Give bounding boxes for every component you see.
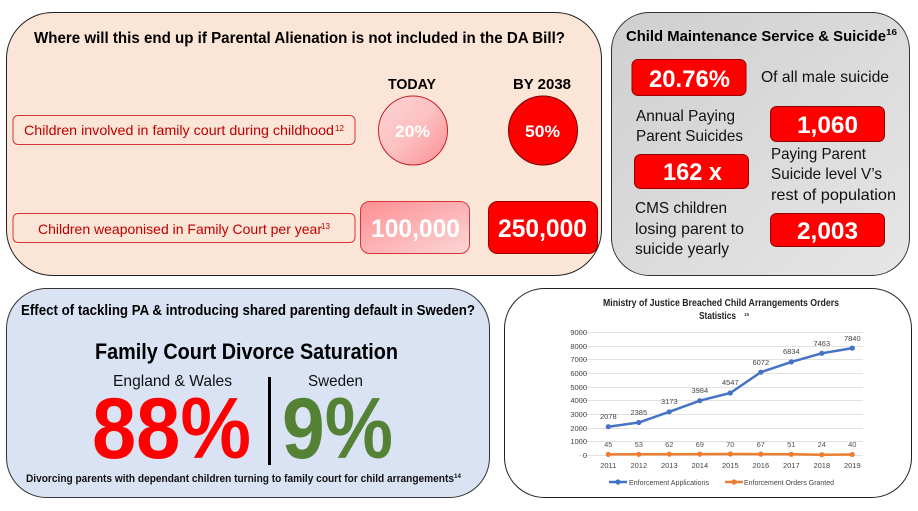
divider: [268, 377, 271, 465]
series: enforcement orders granted: 53: [635, 440, 643, 449]
box: 100,000 today: [360, 202, 470, 254]
x axis labels: 2016: [752, 461, 769, 470]
circle: 50 percent by 2038: 50%: [525, 122, 560, 141]
stat: 9 percent: 9%: [282, 381, 393, 477]
series: enforcement orders granted: 24: [818, 440, 826, 449]
subheading: family court divorce saturation: Family Court Divorce Saturation: [95, 339, 398, 364]
heading: child maintenance service: Child Maintenance Service & Suicide: [626, 28, 886, 45]
x axis labels: 2013: [661, 461, 678, 470]
series: enforcement orders granted: 70: [726, 440, 734, 449]
circle: 20 percent today: [378, 96, 448, 165]
label: sweden: Sweden: [308, 373, 363, 390]
chart title: [603, 298, 839, 322]
y axis labels: [570, 328, 587, 460]
y axis labels: 2000: [570, 424, 587, 433]
footnote: divorcing parents: Divorcing parents with dependant children turning to family court for child arrangements: [26, 473, 454, 485]
series: enforcement applications: 3984: [691, 386, 708, 395]
x axis labels: 2011: [600, 461, 616, 470]
text: annual paying parent suicides: Parent Suicides: [636, 128, 743, 145]
column label: today: TODAY: [388, 76, 436, 93]
text: paying parent suicide level: rest of population: [771, 187, 896, 204]
box: 250,000 by 2038: 250,000: [498, 215, 587, 243]
panel: sweden comparison: [6, 288, 490, 498]
label box: children involved in family court: [13, 116, 355, 144]
y axis labels: 5000: [570, 383, 587, 392]
x axis labels: 2018: [813, 461, 830, 470]
heading: effect of tackling pa: Effect of tackling PA & introducing shared parenting default in Sweden?: [21, 302, 475, 319]
text: cms children losing parent: CMS children: [635, 200, 727, 217]
panel: child maintenance service and suicide: [612, 12, 910, 276]
series: enforcement applications: [600, 334, 861, 429]
series: enforcement orders granted: 45: [604, 440, 612, 449]
chart title: Statistics: [699, 311, 736, 322]
series: enforcement applications: 2078: [600, 412, 617, 421]
y axis labels: 8000: [570, 342, 587, 351]
y axis labels: 3000: [570, 410, 587, 419]
label box: children weaponised: [13, 214, 355, 242]
box: 100,000 today: 100,000: [371, 215, 460, 243]
chart title: 15: [744, 312, 750, 317]
y axis labels: 0: [583, 451, 587, 460]
series: enforcement applications: 6072: [752, 358, 769, 367]
series: enforcement orders granted: 51: [787, 440, 795, 449]
box: 250,000 by 2038: [488, 202, 598, 254]
series: enforcement applications: 2385: [630, 408, 647, 417]
series: enforcement applications: 7840: [844, 334, 861, 343]
stat: 162 x: 162 x: [663, 159, 723, 186]
series: enforcement orders granted: 67: [757, 440, 765, 449]
text: of all male suicide: Of all male suicide: [761, 69, 889, 86]
panel: ministry of justice chart: [504, 288, 912, 498]
circle: 20 percent today: 20%: [395, 122, 430, 141]
legend: [609, 478, 834, 487]
label box: children weaponised: 13: [321, 222, 331, 231]
label box: children involved in family court: 12: [335, 124, 345, 133]
x axis labels: 2012: [630, 461, 647, 470]
footnote: divorcing parents: 14: [454, 474, 462, 480]
text: paying parent suicide level: Suicide level V’s: [771, 166, 882, 183]
y axis labels: 9000: [570, 328, 587, 337]
stat: 20.76 percent: 20.76%: [649, 66, 730, 93]
x axis labels: 2015: [722, 461, 739, 470]
heading: child maintenance service: 16: [886, 28, 898, 37]
column label: by 2038: BY 2038: [513, 76, 571, 93]
panel: parental alienation projection: [6, 12, 602, 276]
text: cms children losing parent: losing parent to: [635, 221, 744, 238]
stat: 162 x: [634, 154, 748, 188]
y axis labels: 7000: [570, 355, 587, 364]
circle: 50 percent by 2038: [508, 96, 578, 165]
series: enforcement applications: 7463: [813, 339, 830, 348]
text: cms children losing parent: suicide yearly: [635, 241, 729, 258]
series: enforcement applications: 6834: [783, 347, 800, 356]
text: cms children losing parent: [635, 200, 744, 258]
legend: Enforcement Applications: [629, 478, 709, 487]
legend: Enforcement Orders Granted: [744, 478, 834, 487]
x axis labels: 2017: [783, 461, 800, 470]
x axis labels: 2014: [691, 461, 708, 470]
series: enforcement applications: 4547: [722, 378, 739, 387]
label box: children involved in family court: Children involved in family court during childhood: [24, 122, 334, 138]
label: england and wales: England & Wales: [113, 373, 232, 390]
y axis labels: 6000: [570, 369, 587, 378]
chart title: Ministry of Justice Breached Child Arrangements Orders: [603, 298, 839, 309]
x axis labels: [600, 461, 861, 470]
heading: where will this end up: Where will this end up if Parental Alienation is not included in the DA Bill?: [34, 30, 565, 47]
text: annual paying parent suicides: Annual Paying: [636, 108, 735, 125]
label box: children weaponised: Children weaponised in Family Court per year: [38, 221, 322, 237]
series: enforcement orders granted: 40: [848, 440, 856, 449]
x axis labels: 2019: [844, 461, 861, 470]
series: enforcement orders granted: 69: [696, 440, 704, 449]
stat: 2,003: 2,003: [797, 218, 858, 245]
stat: 2,003: [770, 214, 884, 246]
text: annual paying parent suicides: [636, 108, 743, 145]
series: enforcement orders granted: [604, 440, 856, 457]
stat: 20.76 percent: [632, 60, 746, 96]
stat: 1,060: [770, 106, 884, 142]
y axis labels: 4000: [570, 396, 587, 405]
text: paying parent suicide level: [771, 146, 896, 204]
stat: 88 percent: 88%: [92, 381, 251, 477]
stat: 1,060: 1,060: [797, 112, 858, 139]
text: paying parent suicide level: Paying Parent: [771, 146, 867, 163]
y axis labels: 1000: [570, 437, 587, 446]
series: enforcement applications: 3173: [661, 397, 678, 406]
series: enforcement orders granted: 62: [665, 440, 673, 449]
line chart: [570, 328, 863, 487]
